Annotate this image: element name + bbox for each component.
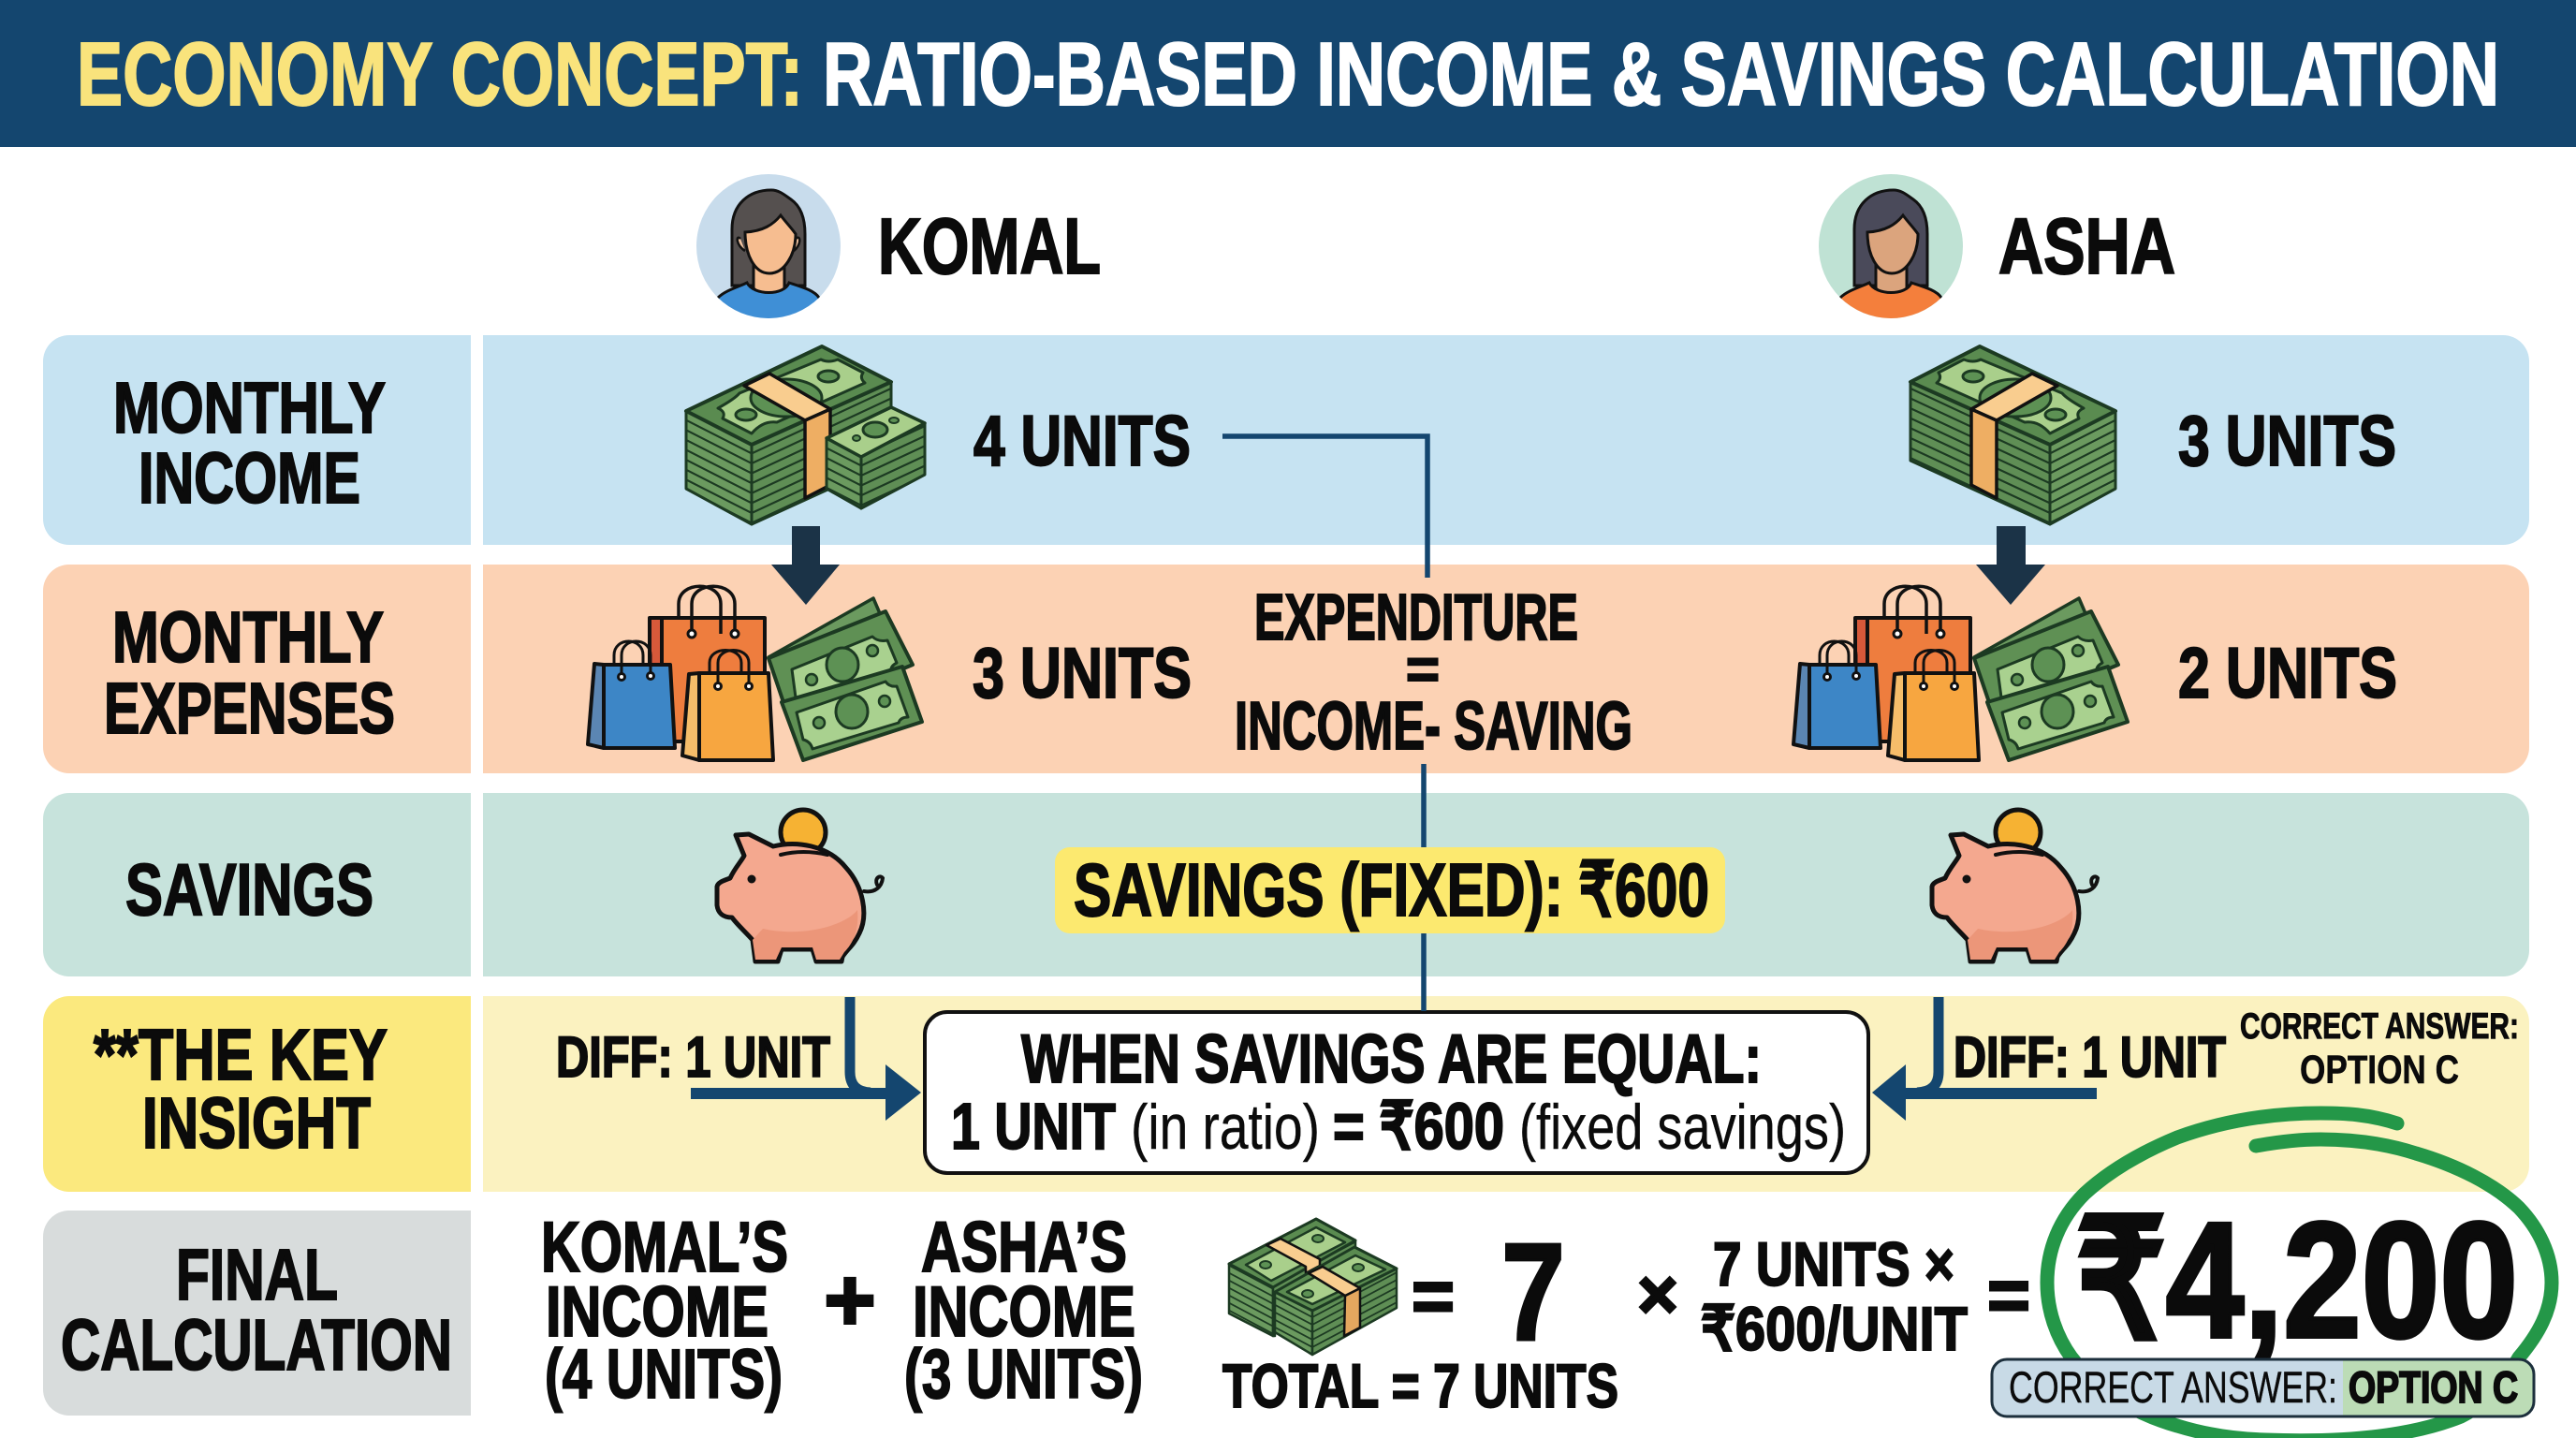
note: correct answer option C [2240,1006,2519,1093]
panel: monthly expenses row [43,565,2529,773]
text: Komal's income 4 units [541,1208,788,1413]
heading: monthly expenses: EXPENSES [104,668,395,749]
green ring around the answer [2047,1113,2552,1438]
icon: Komal shopping bags and cash [588,586,922,760]
formula: expenditure equals income minus saving: INCOME- SAVING [1235,689,1632,764]
operator: plus: + [824,1251,876,1350]
label: Komal difference: DIFF: 1 UNIT [556,1025,830,1089]
panel: savings row [43,793,2529,976]
callout: savings fixed at 600: SAVINGS (FIXED): ₹600 [1074,848,1709,932]
callout: when savings are equal [925,1012,1868,1173]
icon: combined money stacks [1229,1219,1397,1355]
arrow: Asha difference to insight box [1872,997,2097,1121]
connector: income line to expenditure formula [1222,436,1427,578]
heading: the key insight: **THE KEY [94,1015,388,1095]
text: Komal's income 4 units: KOMAL’S [541,1208,788,1287]
operator: equals total: = [1412,1255,1455,1337]
heading: final calculation: CALCULATION [61,1305,452,1386]
text: Komal's income 4 units: INCOME [546,1272,768,1352]
heading: final calculation [61,1235,452,1386]
callout: when savings are equal: WHEN SAVINGS ARE EQUAL: [1021,1021,1762,1097]
number: 7: 7 [1501,1215,1565,1370]
note: correct answer option C: OPTION C [2300,1048,2459,1093]
arrow: Komal income to expenses [771,526,840,605]
heading: monthly income: MONTHLY [113,368,386,448]
title banner [0,0,2576,147]
panel: key insight row [43,996,2529,1192]
text: 7 units times 600 per unit: 7 UNITS × [1713,1229,1954,1299]
name: Komal: KOMAL [878,202,1101,290]
formula: expenditure equals income minus saving: EXPENDITURE [1254,580,1578,653]
arrow: Asha income to expenses [1976,526,2045,605]
icon: Komal money stacks [686,346,925,524]
Komal expenses: 3 units: 3 UNITS [973,634,1192,713]
panel: monthly income row [43,335,2529,545]
heading: monthly income [113,368,386,519]
icon: Komal piggy bank [717,810,883,961]
formula: expenditure equals income minus saving [1235,580,1632,764]
arrow: Komal difference to insight box [691,997,921,1121]
Asha expenses: 2 units: 2 UNITS [2178,634,2397,713]
heading: the key insight [94,1015,388,1164]
text: Asha's income 3 units: ASHA’S [921,1208,1127,1287]
icon: Asha shopping bags and cash [1793,586,2128,760]
text: 7 units times 600 per unit: ₹600/UNIT [1701,1294,1968,1363]
icon: Asha money stack [1910,346,2115,524]
text: Asha's income 3 units [904,1208,1143,1413]
person: Komal [696,174,841,323]
heading: final calculation: FINAL [176,1235,338,1315]
icon: Asha piggy bank [1932,810,2098,961]
label: Asha difference: DIFF: 1 UNIT [1954,1025,2226,1089]
title: yellow part: ECONOMY CONCEPT: [77,24,803,125]
badge: correct answer option C [1992,1359,2534,1416]
Komal income: 4 units: 4 UNITS [973,402,1191,481]
operator: times: × [1637,1255,1678,1333]
text: Komal's income 4 units: (4 UNITS) [545,1335,783,1413]
badge: correct answer option C: OPTION C [2349,1362,2518,1412]
callout: when savings are equal: (in ratio) [1131,1092,1320,1163]
text: Asha's income 3 units: (3 UNITS) [904,1335,1143,1413]
callout: when savings are equal: = ₹600 [1333,1090,1504,1163]
callout: when savings are equal: (fixed savings) [1519,1092,1846,1163]
formula: expenditure equals income minus saving: = [1406,638,1440,702]
operator: equals result: = [1987,1254,2030,1336]
callout: when savings are equal: 1 UNIT [951,1090,1116,1163]
text: Asha's income 3 units: INCOME [913,1272,1135,1352]
panel: final calculation row [43,1189,2534,1420]
heading: monthly expenses [104,597,395,749]
person: Asha [1819,174,1963,323]
heading: monthly expenses: MONTHLY [112,597,384,678]
heading: monthly income: INCOME [139,438,360,519]
text: total 7 units: TOTAL = 7 UNITS [1222,1351,1618,1420]
Asha income: 3 units: 3 UNITS [2178,402,2396,481]
connector: formula through savings to insight box [1421,764,1427,1011]
badge: correct answer option C: CORRECT ANSWER: [2009,1362,2337,1412]
heading: the key insight: INSIGHT [142,1083,371,1164]
heading: savings: SAVINGS [125,848,373,931]
name: Asha: ASHA [1998,202,2175,290]
text: 7 units times 600 per unit [1701,1229,1968,1363]
